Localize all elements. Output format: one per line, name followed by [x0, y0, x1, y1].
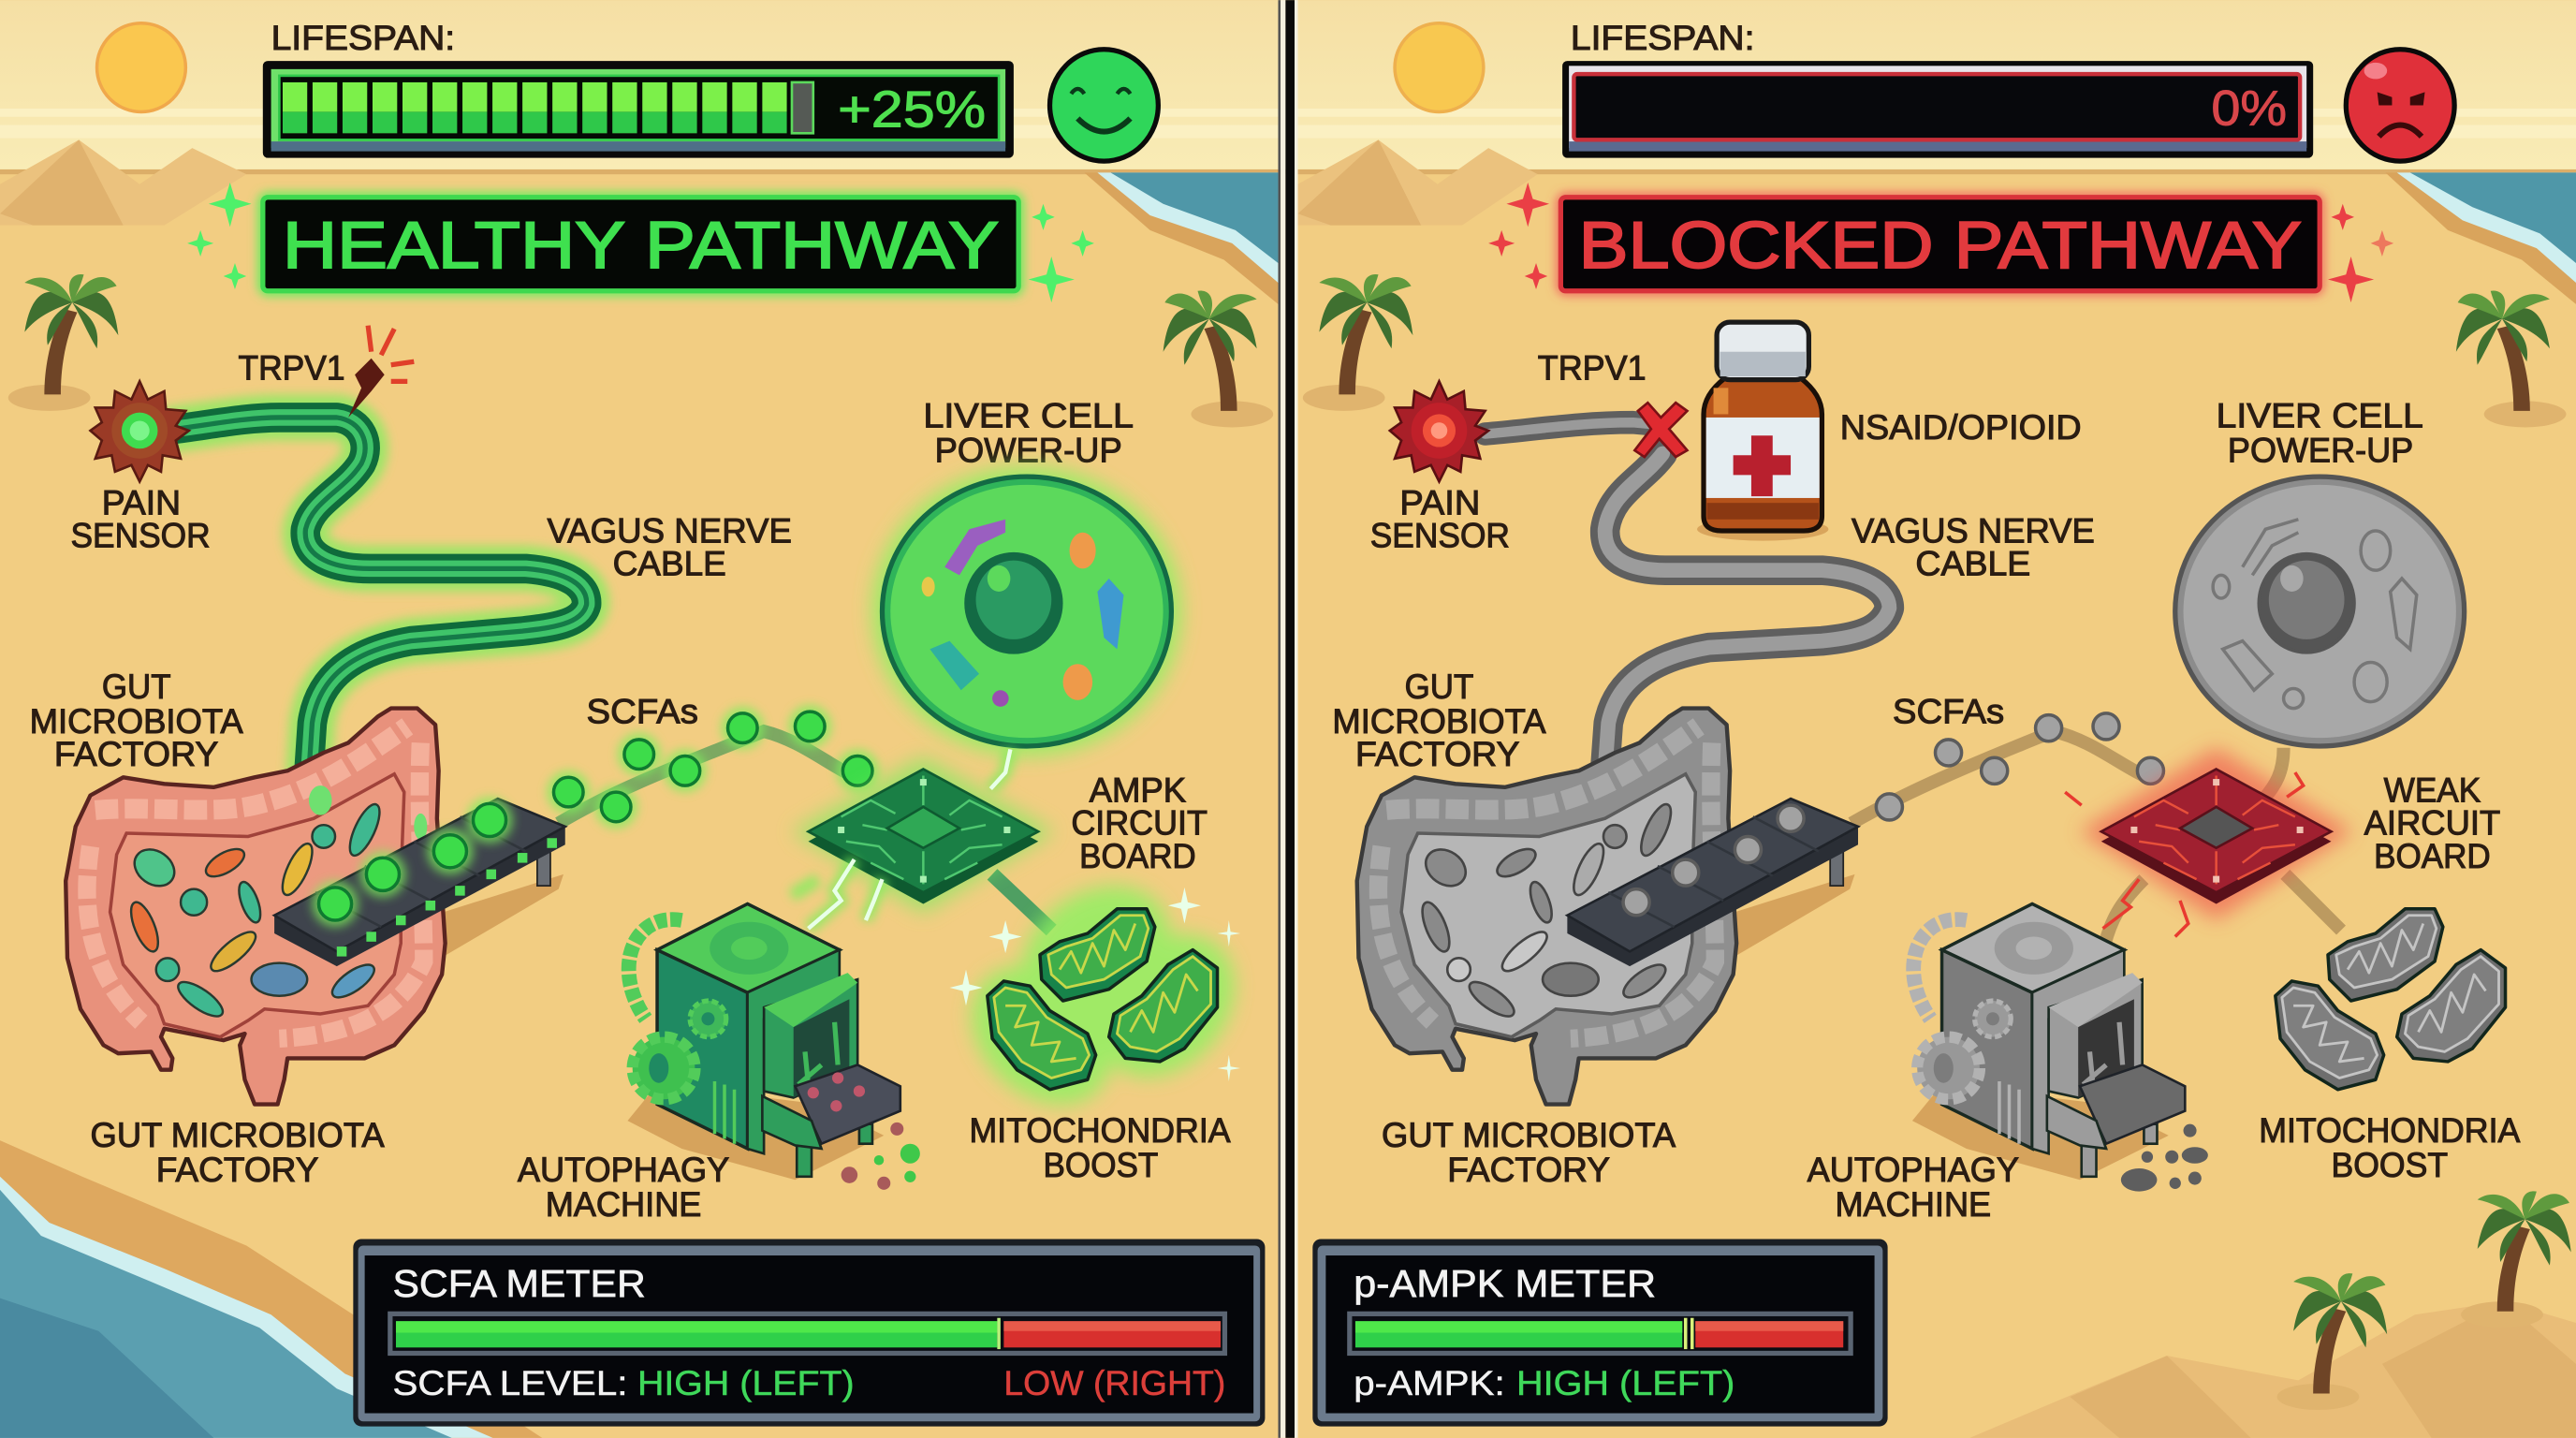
- label: vagus nerve cable: CABLE: [1915, 544, 2030, 582]
- label: gut microbiota factory (bottom): FACTORY: [156, 1151, 318, 1189]
- label: lifespan: LIFESPAN:: [1571, 19, 1754, 57]
- label: NSAID/opioid: NSAID/OPIOID: [1840, 408, 2082, 447]
- label: TRPV1: TRPV1: [238, 349, 345, 388]
- sun: [1395, 23, 1484, 111]
- SCFA balls: [312, 705, 879, 927]
- sparkles: title: [1488, 183, 2393, 302]
- label: SCFAs: SCFAs: [1893, 692, 2004, 730]
- label: vagus nerve cable: VAGUS NERVE: [547, 511, 792, 550]
- label: autophagy machine: AUTOPHAGY: [518, 1151, 729, 1189]
- panel: p-AMPK meter: HIGH (LEFT): [1516, 1364, 1734, 1402]
- sparkles: title: [187, 183, 1094, 302]
- conveyor belt: [274, 799, 565, 966]
- label: liver cell power-up: LIVER CELL: [2217, 396, 2423, 434]
- gut bacteria: [125, 800, 386, 1022]
- stream path: [1852, 731, 2341, 945]
- label: mitochondria boost: [2259, 1111, 2521, 1184]
- label: TRPV1: TRPV1: [1538, 349, 1647, 388]
- label: pain sensor: [1370, 483, 1510, 555]
- icon: autophagy machine (grey): [1912, 903, 2185, 1180]
- icon: autophagy machine: [627, 903, 900, 1180]
- panel: SCFA meter: HIGH (LEFT): [637, 1364, 855, 1402]
- title: blocked pathway: [1560, 198, 2320, 291]
- icon: liver cell: [872, 467, 1181, 756]
- icon: mitochondria: [944, 858, 1263, 1133]
- label: weak aircuit board: AIRCUIT: [2364, 804, 2500, 843]
- icon: palm tree: [8, 274, 118, 411]
- label: gut microbiota factory (top): GUT: [102, 668, 171, 706]
- label: vagus nerve cable: [1852, 511, 2095, 582]
- label: weak aircuit board: [2364, 771, 2500, 875]
- label: autophagy machine: [518, 1151, 729, 1224]
- panel: p-AMPK meter: p-AMPK:: [1354, 1364, 1505, 1402]
- label: gut microbiota factory (top): FACTORY: [1355, 735, 1519, 773]
- label: autophagy machine: [1808, 1151, 2019, 1224]
- title: blocked pathway: BLOCKED PATHWAY: [1579, 208, 2302, 282]
- belt shadow: [1734, 874, 1855, 957]
- icon: AMPK circuit board: [792, 756, 1055, 914]
- icon: gut microbiota factory: [66, 709, 446, 1105]
- green sparks on gut: [309, 785, 427, 840]
- belt shadow: [444, 874, 564, 957]
- label: liver cell power-up: LIVER CELL: [923, 396, 1134, 434]
- icon: palm tree: [1164, 291, 1273, 427]
- label: gut microbiota factory (top): FACTORY: [54, 735, 218, 773]
- label: gut microbiota factory (bottom): FACTORY: [1447, 1151, 1610, 1189]
- panel: SCFA meter: SCFA METER: [392, 1262, 646, 1305]
- icon: mitochondria (grey): [2276, 909, 2506, 1090]
- label: gut microbiota factory (bottom): [1382, 1116, 1676, 1189]
- icon: pain sensor: [1390, 381, 1488, 481]
- conveyor belt: [1567, 799, 1858, 966]
- label: vagus nerve cable: [547, 511, 792, 582]
- stream to mitochondria: [992, 874, 1051, 931]
- panel: p-AMPK meter: p-AMPK METER: [1354, 1262, 1656, 1305]
- panel: p-AMPK meter: [1312, 1239, 1888, 1427]
- panel: SCFA meter: LOW (RIGHT): [1003, 1364, 1225, 1402]
- lightning: [792, 749, 1010, 929]
- gut bacteria (grey): [1417, 800, 1676, 1022]
- items on tray: [808, 1072, 865, 1111]
- label: pain sensor: SENSOR: [1370, 517, 1510, 555]
- label: vagus nerve cable: VAGUS NERVE: [1852, 511, 2095, 550]
- icon: palm tree: [1303, 274, 1412, 411]
- icon: pain sensor: [91, 381, 189, 481]
- label: weak aircuit board: WEAK: [2384, 771, 2481, 810]
- debris green: [874, 1144, 920, 1182]
- label: SCFAs: SCFAs: [587, 692, 698, 730]
- title: healthy pathway: [263, 198, 1018, 291]
- lifespan segments: [283, 82, 787, 133]
- icon: gut (grey): [1357, 709, 1736, 1105]
- label: liver cell power-up: POWER-UP: [935, 431, 1122, 469]
- label: AMPK circuit board: [1071, 771, 1208, 875]
- value: 0%: [2211, 81, 2287, 137]
- label: gut microbiota factory (top): MICROBIOTA: [1332, 702, 1546, 741]
- label: liver cell power-up: [2217, 396, 2423, 469]
- label: gut microbiota factory (top): GUT: [1405, 668, 1473, 706]
- label: gut microbiota factory (top): [1332, 668, 1546, 773]
- label: gut microbiota factory (bottom): GUT MICROBIOTA: [1382, 1116, 1676, 1154]
- panel: SCFA meter: SCFA LEVEL:: [392, 1364, 627, 1402]
- icon: palm tree: [2456, 291, 2566, 427]
- debris: [842, 1123, 903, 1190]
- icon: palm tree: [2461, 1191, 2571, 1328]
- label: weak aircuit board: BOARD: [2374, 837, 2491, 875]
- panel: healthy pathway: [8, 19, 1273, 1427]
- SCFA balls (grey): [1623, 713, 2163, 916]
- lifespan bar: [1562, 61, 2313, 158]
- label: mitochondria boost: BOOST: [1043, 1146, 1158, 1184]
- icon: palm tree: [2277, 1273, 2387, 1410]
- icon: liver cell (inactive): [2175, 477, 2465, 746]
- icon: block X: [1634, 403, 1687, 457]
- label: gut microbiota factory (bottom): [91, 1116, 385, 1189]
- label: autophagy machine: AUTOPHAGY: [1808, 1151, 2019, 1189]
- label: AMPK circuit board: CIRCUIT: [1071, 804, 1208, 843]
- label: gut microbiota factory (top): [30, 668, 243, 773]
- nutrient stream path: [559, 731, 846, 823]
- label: pain sensor: PAIN: [102, 483, 181, 521]
- label: liver cell power-up: [923, 396, 1134, 469]
- belt lights: [337, 838, 557, 957]
- label: pain sensor: SENSOR: [70, 517, 211, 555]
- icon: NSAID/opioid bottle: [1697, 322, 1828, 541]
- label: liver cell power-up: POWER-UP: [2228, 431, 2413, 469]
- label: mitochondria boost: BOOST: [2331, 1146, 2448, 1184]
- sun: [97, 23, 185, 111]
- label: pain sensor: [70, 483, 211, 555]
- label: lifespan: LIFESPAN:: [271, 19, 455, 57]
- center divider: [1278, 0, 1298, 1438]
- icon: TRPV1 spark: [348, 326, 414, 418]
- label: gut microbiota factory (top): MICROBIOTA: [30, 702, 243, 741]
- panel: blocked pathway: [1303, 19, 2571, 1427]
- label: autophagy machine: MACHINE: [1835, 1185, 1991, 1224]
- meter bar: [388, 1312, 1227, 1356]
- label: pain sensor: PAIN: [1399, 483, 1480, 521]
- panel: SCFA meter: [353, 1239, 1265, 1427]
- icon: weak circuit board: [2065, 748, 2352, 937]
- debris: [2121, 1124, 2208, 1192]
- vagus nerve cable (blocked): [1486, 422, 1889, 770]
- label: AMPK circuit board: AMPK: [1090, 771, 1187, 810]
- label: mitochondria boost: [970, 1111, 1231, 1184]
- label: autophagy machine: MACHINE: [546, 1185, 701, 1224]
- meter bar: [1347, 1312, 1853, 1356]
- label: gut microbiota factory (bottom): GUT MICROBIOTA: [91, 1116, 385, 1154]
- icon: happy face: [1050, 50, 1158, 161]
- title: healthy pathway: HEALTHY PATHWAY: [283, 208, 999, 282]
- label: mitochondria boost: MITOCHONDRIA: [2259, 1111, 2521, 1150]
- label: mitochondria boost: MITOCHONDRIA: [970, 1111, 1231, 1150]
- lifespan bar: [263, 61, 1014, 158]
- label: AMPK circuit board: BOARD: [1079, 837, 1196, 875]
- vagus nerve cable: [176, 418, 587, 772]
- icon: sad face: [2346, 50, 2454, 161]
- label: vagus nerve cable: CABLE: [613, 544, 726, 582]
- value: +25%: [838, 81, 986, 138]
